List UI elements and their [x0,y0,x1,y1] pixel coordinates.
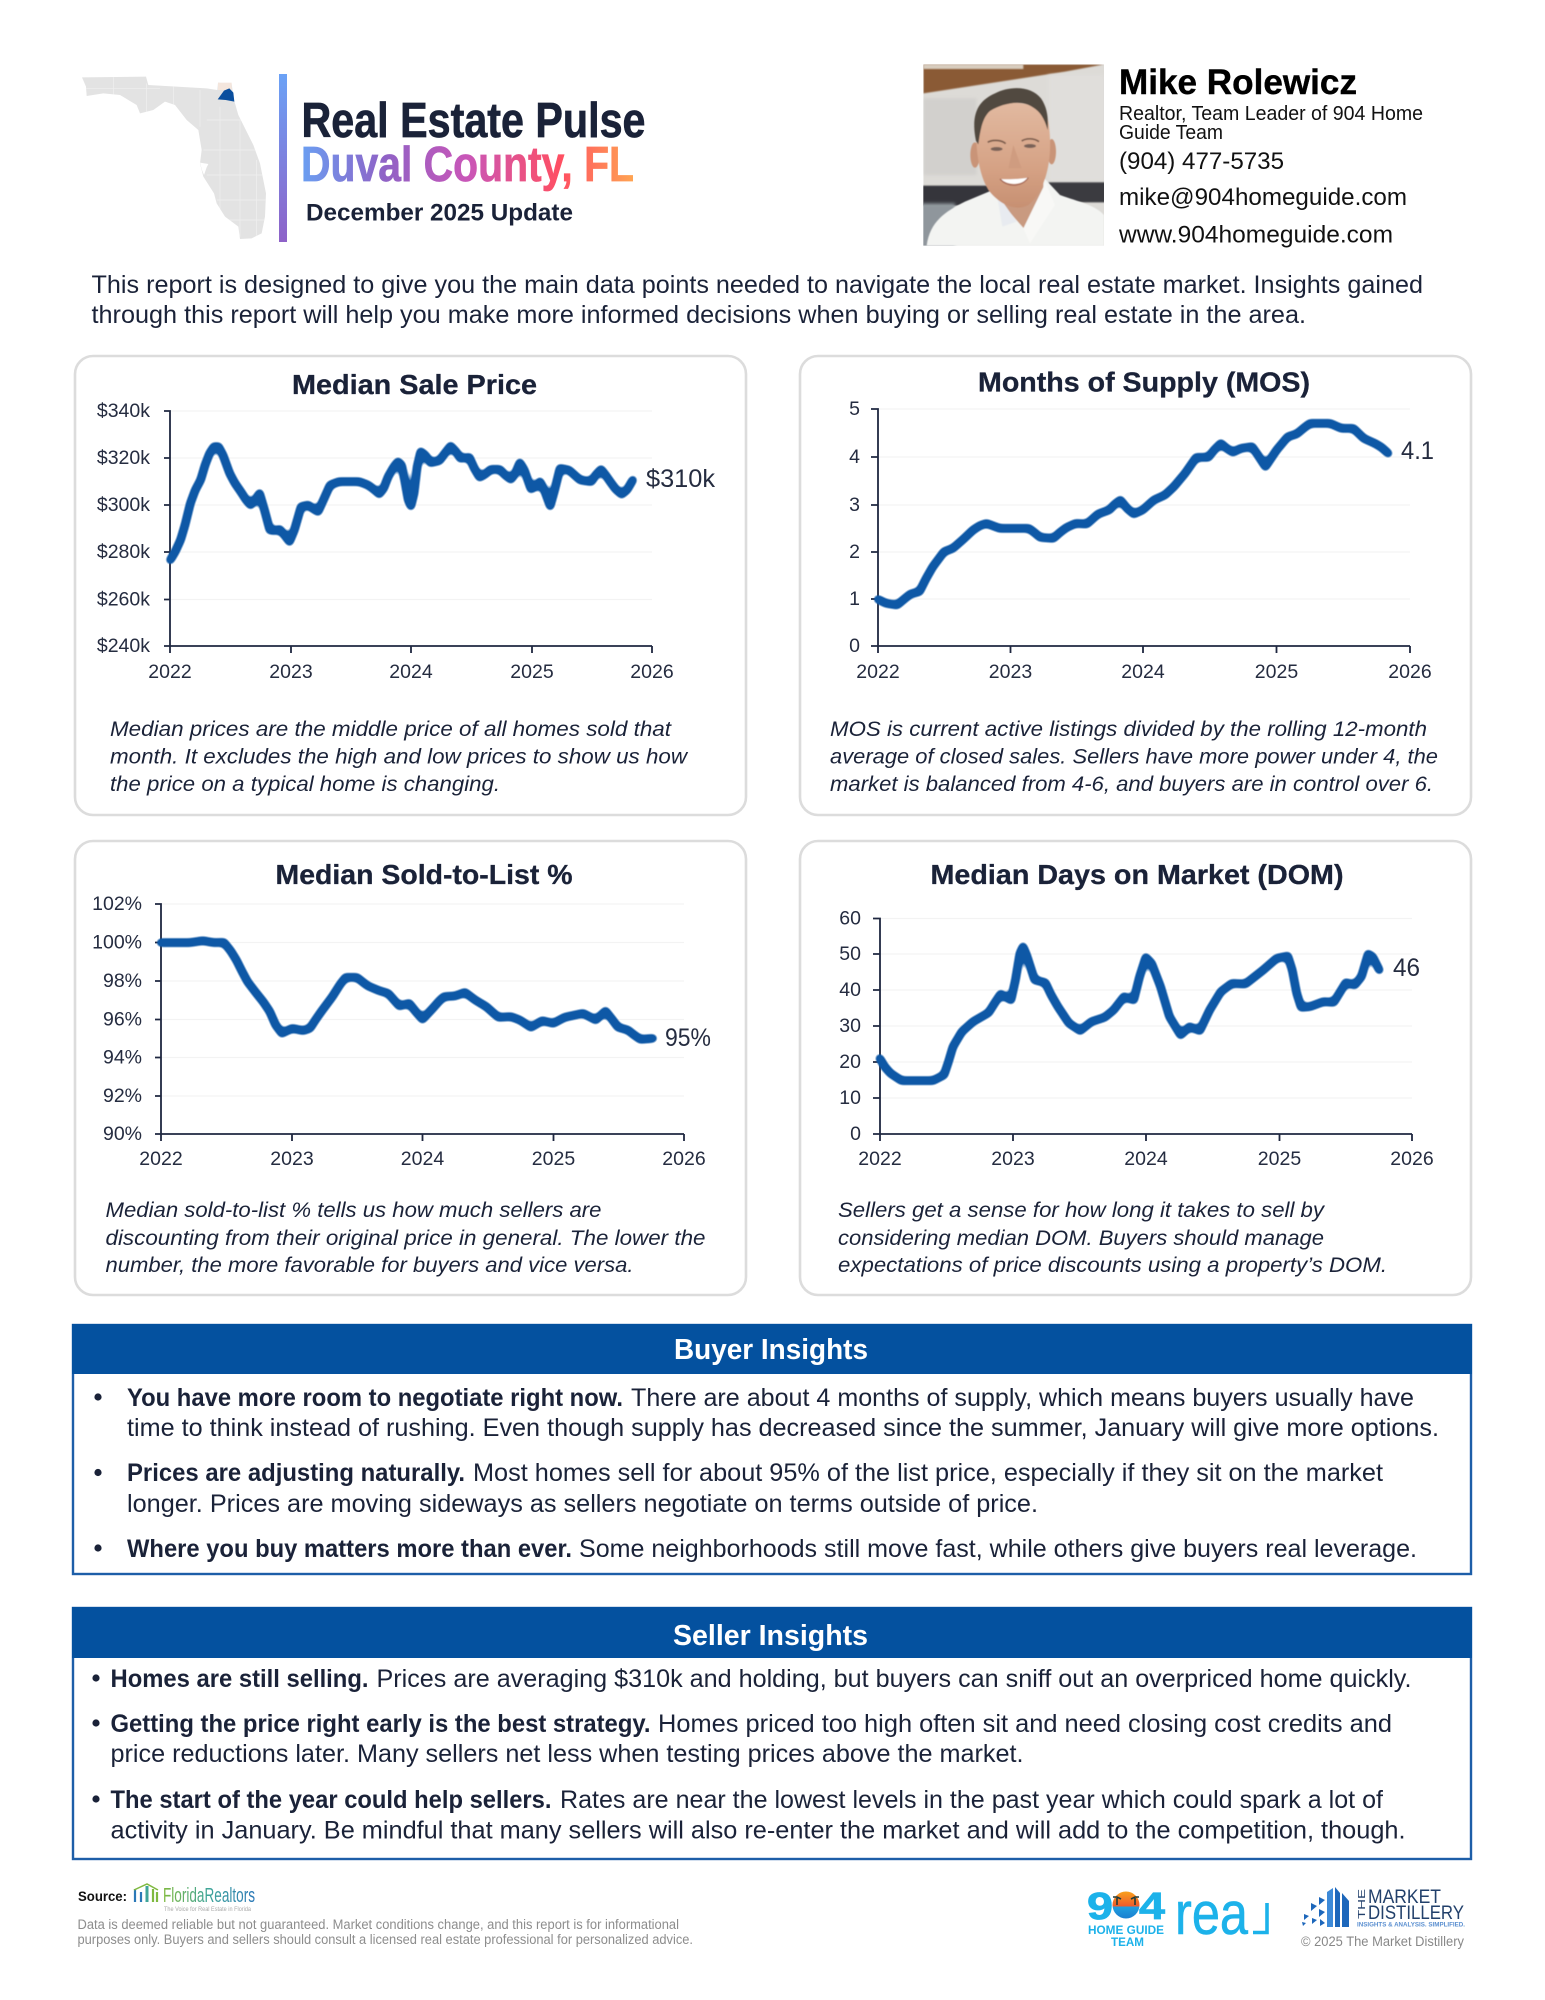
panel: Median Sale Price [75,356,746,815]
line chart: sold-to-list: 2024 [401,1148,444,1170]
line chart: months of supply: 0 [849,635,860,657]
line chart: sold-to-list: 98% [103,970,142,992]
phone: (904) 477-5735 [1119,148,1284,175]
caption: Sellers get a sense for how long it takes to sell by [838,1198,1325,1222]
caption: market is balanced from 4-6, and buyers are in control over 6. [830,772,1433,796]
bullet 2 [94,1459,1383,1518]
logo: Florida Realtors: The Voice for Real Estate in Florida [164,1906,251,1913]
value label: 4.1 [1401,437,1434,465]
line chart: months of supply: 2025 [1255,661,1298,683]
panel: Seller Insights [72,1607,1472,1859]
line chart: sold-to-list [92,893,711,1170]
header band [72,1607,1472,1658]
bullet 1: time to think instead of rushing. Even though supply has decreased since the summer, January will give more options. [127,1414,1439,1442]
line chart: days on market: 50 [839,943,861,965]
caption: MOS is current active listings divided by the rolling 12-month [830,717,1427,741]
heading: Months of Supply (MOS) [978,366,1310,398]
agent contact block [915,63,1423,250]
value label: 95% [665,1024,711,1052]
bullet 1: Homes are still selling. [110,1665,368,1693]
line chart: months of supply: 4 [849,446,860,468]
line chart: days on market: 2024 [1124,1148,1168,1170]
intro paragraph: This report is designed to give you the main data points needed to navigate the local real estate market. Insights gained [92,271,1423,299]
heading: Median Days on Market (DOM) [930,859,1344,890]
caption: considering median DOM. Buyers should manage [838,1226,1324,1250]
bullet 2: Getting the price right early is the best strategy. [110,1710,650,1738]
portrait photo [915,64,1112,250]
bullet 3 [92,1786,1405,1844]
source label: Source: [78,1889,127,1904]
line chart: sold-to-list: 102% [92,893,142,915]
line chart: days on market: 60 [839,908,861,930]
panel: Buyer Insights [72,1324,1472,1574]
line chart: months of supply: 2022 [856,661,900,683]
bullet 3: Where you buy matters more than ever. [127,1535,572,1563]
logo: The Market Distillery: THE [1356,1889,1368,1919]
bullet 2: longer. Prices are moving sideways as sellers negotiate on terms outside of price. [127,1490,1038,1518]
line chart: days on market: 2026 [1390,1148,1434,1170]
caption: expectations of price discounts using a property’s DOM. [838,1253,1387,1277]
line chart: months of supply: 5 [849,398,860,420]
bullet 1: There are about 4 months of supply, which means buyers usually have [631,1384,1414,1412]
caption: discounting from their original price in general. The lower the [106,1226,706,1250]
line chart: sold-to-list: 94% [103,1046,142,1068]
header band: Seller Insights [673,1620,868,1652]
line chart: months of supply: 1 [849,588,860,610]
disclaimer: Data is deemed reliable but not guaranteed. Market conditions change, and this report is for informational [78,1917,679,1932]
line chart: days on market [839,908,1434,1170]
line chart: days on market: 2022 [858,1148,902,1170]
line chart: sold-to-list: 96% [103,1008,142,1030]
logo: The Market Distillery [1302,1887,1465,1928]
line chart: sold-to-list: 2026 [662,1148,706,1170]
bullet 1 [94,1384,1439,1442]
line chart: sold-to-list: 90% [103,1123,142,1145]
bullet 3: The start of the year could help sellers. [110,1786,552,1814]
line chart: months of supply: 2 [849,541,860,563]
header: map and report title [60,74,646,242]
bullet 1: Prices are averaging $310k and holding, but buyers can sniff out an overpriced home quickly. [376,1665,1412,1693]
caption: Median prices are the middle price of all homes sold that [110,717,672,741]
logo: 904 Home Guide Team: HOME GUIDE [1088,1925,1164,1937]
agent role: Guide Team [1119,122,1223,144]
line chart: months of supply [849,398,1434,683]
heading: Median Sold-to-List % [276,859,573,890]
header band [72,1324,1472,1374]
line chart: days on market: 10 [839,1087,861,1109]
logo: Florida Realtors: FloridaRealtors [163,1885,255,1907]
panel: Median Sold-to-List % [75,841,746,1295]
bullet 2: Prices are adjusting naturally. [127,1459,465,1487]
intro paragraph: through this report will help you make more informed decisions when buying or selling real estate in the area. [92,301,1306,329]
caption [110,717,689,796]
line chart: median sale price: 2026 [630,661,674,683]
bullet 2 [92,1710,1392,1768]
bullet 2: price reductions later. Many sellers net less when testing prices above the market. [110,1740,1024,1768]
logo: 904 Home Guide Team: 9 [1087,1886,1113,1928]
line chart: median sale price: 2023 [269,661,313,683]
line chart: median sale price: $280k [97,541,150,563]
logo: Florida Realtors [134,1884,255,1913]
caption [838,1198,1387,1277]
panel: Median Days on Market [800,841,1471,1295]
disclaimer: purposes only. Buyers and sellers should consult a licensed real estate professional for personalized advice. [78,1932,693,1947]
caption: month. It excludes the high and low prices to show us how [110,744,689,768]
logo: 904 Home Guide Team [1087,1886,1165,1949]
logo: The Market Distillery: INSIGHTS & ANALYSIS. SIMPLIFIED. [1357,1922,1465,1928]
caption: Median sold-to-list % tells us how much sellers are [106,1198,602,1222]
bullet 3: Some neighborhoods still move fast, while others give buyers real leverage. [579,1535,1417,1563]
caption: the price on a typical home is changing. [110,772,500,796]
icon: Florida map with Duval County highlighted [82,76,266,239]
email: mike@904homeguide.com [1119,184,1407,211]
line chart: days on market: 30 [839,1015,861,1037]
line chart: sold-to-list: 2022 [139,1148,183,1170]
agent role [1119,103,1423,144]
line chart: sold-to-list: 100% [92,932,142,954]
line chart: sold-to-list: 2025 [532,1148,575,1170]
line chart: days on market: 0 [850,1123,861,1145]
bullet 3: Rates are near the lowest levels in the past year which could spark a lot of [560,1786,1383,1814]
line chart: months of supply: 2024 [1121,661,1165,683]
bullet 1: You have more room to negotiate right now. [127,1384,623,1412]
heading: Median Sale Price [292,369,537,400]
line chart: median sale price: $240k [97,635,150,657]
header band: Buyer Insights [674,1334,868,1366]
intro paragraph [92,271,1423,329]
agent name: Mike Rolewicz [1119,63,1357,102]
bullet 2: Most homes sell for about 95% of the list price, especially if they sit on the market [473,1459,1383,1487]
line chart: median sale price [97,400,715,683]
bullet 3: activity in January. Be mindful that many sellers will also re-enter the market and will add to the competition, though. [110,1816,1406,1844]
line chart: months of supply: 2023 [989,661,1032,683]
logo: The Market Distillery: MARKET [1368,1887,1441,1908]
subtitle: December 2025 Update: December 2025 Update [306,200,573,226]
line chart: months of supply: 3 [849,494,860,516]
line chart: median sale price: $300k [97,494,150,516]
value label: 46 [1393,954,1420,982]
footer: source and disclaimer [78,1884,693,1947]
bullet 3 [94,1535,1417,1563]
line chart: median sale price: 2022 [148,661,192,683]
title: Duval County, FL: Duval County, FL [301,138,634,192]
line chart: median sale price: 2025 [510,661,554,683]
line chart: median sale price: $340k [97,400,150,422]
accent bar [279,74,287,242]
line chart: days on market: 2023 [991,1148,1035,1170]
line chart: days on market: 40 [839,979,861,1001]
logo: 904 Home Guide Team: TEAM [1111,1937,1144,1949]
title: Real Estate Pulse: Real Estate Pulse [302,94,646,148]
copyright: © 2025 The Market Distillery [1301,1934,1464,1949]
website: www.904homeguide.com [1118,222,1393,248]
line chart: sold-to-list: 92% [103,1085,142,1107]
caption: number, the more favorable for buyers and vice versa. [106,1253,634,1277]
line chart: median sale price: $260k [97,588,150,610]
panel: Months of Supply [800,356,1471,815]
caption: average of closed sales. Sellers have more power under 4, the [830,744,1438,768]
line chart: months of supply: 2026 [1388,661,1432,683]
logo: The Market Distillery: DISTILLERY [1368,1903,1464,1924]
agent role: Realtor, Team Leader of 904 Home [1119,103,1423,125]
line chart: days on market: 20 [839,1051,861,1073]
value label: $310k [646,465,715,493]
logo: 904 Home Guide Team: 4 [1139,1886,1165,1928]
line chart: sold-to-list: 2023 [270,1148,314,1170]
bullet 2: Homes priced too high often sit and need closing cost credits and [658,1710,1392,1738]
caption [830,717,1438,796]
caption [106,1198,706,1277]
line chart: median sale price: $320k [97,447,150,469]
disclaimer [78,1917,693,1947]
line chart: median sale price: 2024 [389,661,433,683]
logo: real: rea [1175,1880,1249,1947]
line chart: days on market: 2025 [1258,1148,1301,1170]
